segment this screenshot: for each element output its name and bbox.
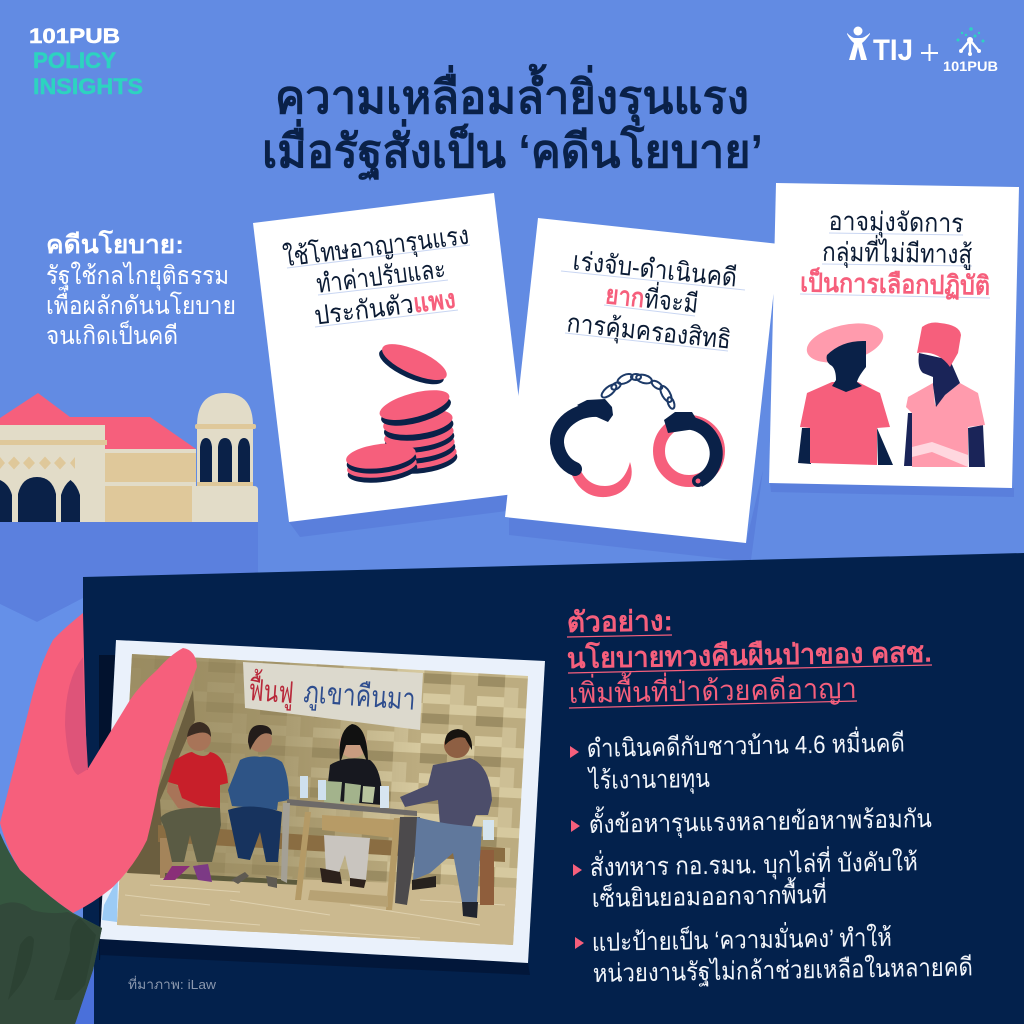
photo credit: ที่มาภาพ: iLaw xyxy=(128,976,217,992)
title: เมื่อรัฐสั่งเป็น ‘คดีนโยบาย’ xyxy=(262,119,763,181)
bullet 2: ตั้งข้อหารุนแรงหลายข้อหาพร้อมกัน xyxy=(589,800,932,840)
card 1 text xyxy=(281,220,471,331)
card 2 text xyxy=(561,246,745,356)
bullet 1 xyxy=(570,725,905,796)
panel: card 2 arrest and prosecution xyxy=(505,218,779,543)
panel: card 1 fines and bail xyxy=(253,193,530,522)
icon: coins xyxy=(345,336,459,486)
bullet 4: แปะป้ายเป็น ‘ความมั่นคง’ ทำให้ xyxy=(592,920,892,957)
card 1 text: ประกันตัวแพง xyxy=(313,284,457,331)
bullet 3 xyxy=(573,844,918,913)
decorative lower-left shade xyxy=(0,522,258,840)
photo banner xyxy=(243,662,423,730)
photo table and person 3 xyxy=(281,724,420,910)
photo: panel discussion xyxy=(110,650,535,950)
photo banner: ภูเขาคืนมา xyxy=(302,676,417,718)
title xyxy=(262,63,763,181)
example heading: เพิ่มพื้นที่ป่าด้วยคดีอาญา xyxy=(568,668,857,709)
definition text: รัฐใช้กลไกยุติธรรม xyxy=(46,261,229,291)
photo person 4 xyxy=(400,729,494,918)
bullet 4 xyxy=(575,920,973,988)
logo: 101PUB Policy Insights: POLICY xyxy=(33,48,116,73)
icon: courthouse building xyxy=(0,393,258,522)
bullet 4: หน่วยงานรัฐไม่กล้าช่วยเหลือในหลายคดี xyxy=(593,952,973,988)
card 2 text: การคุ้มครองสิทธิ xyxy=(565,308,733,356)
light blue patch behind hand xyxy=(102,878,118,922)
card 3 text xyxy=(800,206,990,301)
definition text xyxy=(46,229,236,350)
panel: card 3 selective enforcement xyxy=(769,183,1019,488)
card 3 text: อาจมุ่งจัดการ xyxy=(828,206,964,239)
card 2 text: เร่งจับ-ดำเนินคดี xyxy=(571,246,739,293)
photo banner: ฟื้นฟู xyxy=(247,668,295,711)
bullet 3: เซ็นยินยอมออกจากพื้นที่ xyxy=(592,876,827,913)
example heading xyxy=(567,605,932,709)
logo: TIJ + 101PUB: 101PUB xyxy=(943,58,998,74)
card 3 text: เป็นการเลือกปฏิบัติ xyxy=(800,266,990,301)
logo: 101PUB Policy Insights: INSIGHTS xyxy=(33,74,143,99)
example heading: นโยบายทวงคืนผืนป่าของ คสช. xyxy=(567,635,932,674)
panel: dark example section xyxy=(75,553,1024,1024)
card 1 text: ใช้โทษอาญารุนแรง xyxy=(281,220,471,273)
definition text: จนเกิดเป็นคดี xyxy=(46,320,178,350)
sleeve xyxy=(0,833,102,1024)
icon: two women silhouettes xyxy=(798,317,985,467)
logo: 101PUB Policy Insights: 101PUB xyxy=(29,25,120,48)
title: ความเหลื่อมล้ำยิ่งรุนแรง xyxy=(275,63,749,126)
card shadows xyxy=(289,470,1014,560)
photo bench xyxy=(158,825,505,905)
logo: TIJ + 101PUB xyxy=(847,26,998,74)
definition text: เพื่อผลักดันนโยบาย xyxy=(46,288,236,320)
photo person 1 xyxy=(160,722,228,882)
bullet 1: ไร้เงานายทุน xyxy=(587,764,710,796)
bullet 1: ดำเนินคดีกับชาวบ้าน 4.6 หมื่นคดี xyxy=(587,725,905,763)
example heading: ตัวอย่าง: xyxy=(567,605,673,638)
icon: hand holding photo xyxy=(0,613,197,1024)
photo person 2 xyxy=(228,725,289,888)
card 1 text: ทำค่าปรับและ xyxy=(315,253,447,299)
card 3 text: กลุ่มที่ไม่มีทางสู้ xyxy=(822,234,973,270)
logo: TIJ + 101PUB: TIJ xyxy=(873,34,913,67)
definition text: คดีนโยบาย: xyxy=(46,229,184,259)
logo: 101PUB Policy Insights xyxy=(29,25,143,99)
bullet 3: สั่งทหาร กอ.รมน. บุกไล่ที่ บังคับให้ xyxy=(590,844,918,883)
icon: handcuffs xyxy=(557,372,719,497)
photo frame xyxy=(100,640,545,963)
bullet list xyxy=(570,725,973,988)
card 2 text: ยากที่จะมี xyxy=(604,276,700,319)
